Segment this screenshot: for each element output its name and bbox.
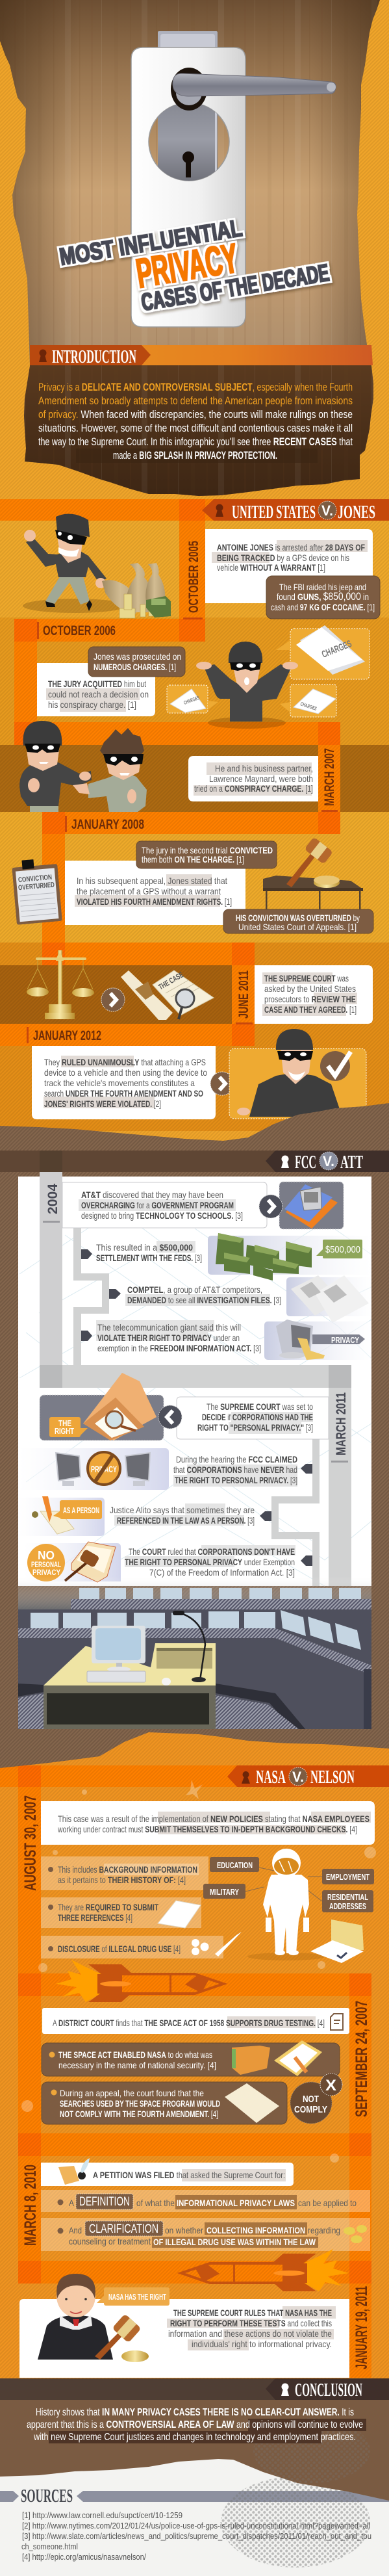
text block: AT&T overcharging: designed to bring TECHNOLOGY TO SCHOOLS. [3] (81, 1210, 243, 1221)
callout: new policies (41, 1801, 375, 1845)
icons: charges documents: CHARGES (183, 695, 201, 706)
date: March 2011 (331, 1392, 349, 1463)
text block: court ruling (125, 1545, 312, 1578)
tag: education: EDUCATION (217, 1860, 253, 1870)
text block: clarification: CLARIFICATION (89, 2222, 158, 2236)
text block: definition: DEFINITION (79, 2195, 130, 2209)
callout: NASA has the right (97, 2287, 169, 2306)
callout: numerous charges: NUMEROUS CHARGES. [1] (94, 662, 176, 672)
heading: FCC v. ATT (0, 1151, 389, 1173)
callout: Antoine Jones arrested: BEING TRACKED by a GPS device on his (217, 553, 349, 563)
badge: not comply (290, 2074, 342, 2124)
callout: appeal: SEARCHES USED BY THE SPACE PROGRAM WOULD (60, 2098, 220, 2109)
text block: sources list: [1] http://www.law.cornell.edu/supct/cert/10-1259 (22, 2510, 182, 2520)
tag: residential addresses (322, 1890, 373, 1912)
heading: introduction: INTRODUCTION (52, 347, 136, 367)
callout: Supreme Court rules: RIGHT TO PERFORM THESE TESTS and collect this (170, 2318, 332, 2328)
intro text background (24, 365, 373, 496)
icon: keyhole (281, 1156, 289, 1168)
callout: unanimous ruling: They RULED UNANIMOUSLY that attaching a GPS (44, 1057, 206, 1067)
callout: Supreme Court rules (19, 2299, 349, 2378)
callout: numerous charges: THE JURY ACQUITTED him but (48, 679, 146, 689)
callout: Supreme Court review: CASE AND THEY AGREED. [1] (264, 1004, 357, 1015)
icon: no personal privacy badge and gavel on book: NO (38, 1549, 55, 1562)
icon: folder with checklist (310, 1919, 364, 1963)
text block: introduction: the way to the Supreme Court. In this infographic you'll see three RECENT CASES that (38, 436, 353, 448)
text block: AT&T overcharging (62, 1182, 267, 1228)
date: 2004: 2004 (45, 1184, 60, 1214)
date: January 2008 (65, 816, 144, 832)
text block: settlement: This resulted in a $500,000 (96, 1242, 193, 1253)
callout: unanimous ruling: device to a vehicle and then using the device to (44, 1067, 207, 1078)
illustration: rocket reversed (181, 2249, 349, 2291)
date: October 2005 (183, 541, 203, 619)
callout: unanimous ruling: track the vehicle's movements constitutes a (44, 1078, 195, 1088)
date: October 2005: OCTOBER 2005 (186, 541, 201, 613)
heading: United States v. Jones: V. (321, 502, 333, 519)
callout: Supreme Court rules: individuals' right to informational privacy. (192, 2339, 332, 2349)
heading: United States v. Jones: UNITED STATES (232, 502, 316, 523)
callout: conviction overturned (223, 909, 373, 933)
decorative sparkles (21, 1780, 376, 2163)
illustration: happy thief with check mark (229, 1029, 366, 1119)
arrow: to the case (101, 988, 125, 1011)
text block: right to privacy (81, 1320, 261, 1353)
icons: charges documents (167, 625, 370, 717)
callout: FBI raid (266, 576, 380, 619)
text block: right to privacy: The telecommunication giant said this will (97, 1322, 241, 1333)
arrow: AT&T circle (259, 1195, 282, 1218)
date: August 30, 2007: AUGUST 30, 2007 (21, 1795, 40, 1891)
icon: gavel and table (263, 837, 363, 910)
panel: brown FCC section background (0, 1103, 389, 1768)
title: PRIVACY (133, 235, 241, 297)
callout: petition (41, 2158, 294, 2186)
text block: clarification: on whether (165, 2225, 203, 2235)
text block: settlement (81, 1241, 202, 1263)
callout: unanimous ruling: search UNDER THE FOURTH AMENDMENT AND SO (44, 1088, 203, 1099)
icon: keyhole (242, 1771, 250, 1784)
panel: conclusion background and sources paper (0, 2378, 389, 2576)
callout: Supreme Court review: THE SUPREME COURT was (264, 973, 349, 983)
icon: stacks of cash (208, 1233, 371, 1281)
illustration: rocket (56, 1960, 223, 2002)
badge: not comply: NOT (303, 2094, 319, 2105)
icon: as a person document (18, 1496, 105, 1536)
date: January 19, 2011: JANUARY 19, 2011 (353, 2286, 371, 2369)
illustration: running thief with money bags (23, 514, 171, 618)
text block: background information: as it pertains to THEIR HISTORY OF: [4] (58, 1875, 186, 1885)
callout: NASA has the right: NASA HAS THE RIGHT (108, 2292, 166, 2302)
text block: clarification: OF ILLEGAL DRUG USE WAS WITHIN THE LAW (153, 2237, 316, 2247)
badge: not comply: X (325, 2077, 336, 2094)
text block: conclusion: apparent that this is a CONTROVERSIAL AREA OF LAW and opinions will continue to evolve (27, 2419, 363, 2430)
text block: right to privacy: VIOLATE THEIR RIGHT TO PRIVACY under an (97, 1333, 240, 1343)
callout: numerous charges: could not reach a decision on (48, 689, 149, 699)
date: March 2007: MARCH 2007 (322, 748, 337, 806)
text block: COMPTEL (109, 1284, 281, 1306)
text block: definition: can be applied to (298, 2198, 357, 2208)
text block: sources list: ch_someone.html (21, 2542, 78, 2551)
callout: new policies: This case was a result of the implementation of NEW POLICIES stating that NASA EMPLOYEES (58, 1814, 370, 1824)
icon: the case file with magnifier: THE CASE (157, 970, 185, 992)
text block: introduction: made a BIG SPLASH IN PRIVACY PROTECTION. (113, 450, 277, 462)
text block: court ruling: THE RIGHT TO PERSONAL PRIVACY under Exemption (125, 1557, 295, 1567)
callout: conviction overturned: United States Court of Appeals. [1] (238, 922, 357, 932)
illustration: judge with gavel (38, 2274, 149, 2362)
callout: appeal: During an appeal, the court found that the (60, 2088, 204, 2098)
tag: military: MILITARY (210, 1887, 239, 1897)
tag: employment: EMPLOYMENT (326, 1872, 370, 1882)
text block: clarification: COLLECTING INFORMATION (207, 2225, 305, 2235)
callout: Antoine Jones arrested: vehicle WITHOUT A WARRANT [1] (217, 562, 325, 573)
text block: clarification: And (69, 2225, 82, 2235)
callout: FBI raid: cash and 97 KG OF COCAINE. [1] (271, 602, 375, 612)
text block: FCC claimed (173, 1454, 312, 1487)
text block: references (41, 1897, 201, 1928)
text block: Supreme Court to decide (177, 1397, 329, 1439)
text block: introduction (38, 382, 353, 463)
date: January 2012: JANUARY 2012 (33, 1028, 101, 1043)
heading: introduction (30, 345, 373, 367)
text block: Justice Alito (110, 1503, 271, 1526)
text block: FCC claimed: During the hearing the FCC CLAIMED (176, 1454, 297, 1464)
text block: background information: This includes BACKGROUND INFORMATION (58, 1864, 197, 1875)
text block: COMPTEL: DEMANDED to see all INVESTIGATION FILES. [3] (127, 1295, 281, 1305)
illustration: shrugging thief (196, 642, 298, 729)
icon: keyhole (39, 350, 47, 362)
date: October 2006 (37, 622, 116, 639)
callout: Space Act enabled NASA: necessary in the name of national security. [4] (58, 2060, 216, 2070)
date: January 2012 (27, 1027, 101, 1043)
callout: district court (42, 2008, 349, 2034)
panel: wood door header (0, 0, 389, 501)
callout: FBI raid: The FBI raided his jeep and (279, 582, 366, 592)
callout: Supreme Court review (255, 965, 373, 1024)
text block: Justice Alito: REFERENCED IN THE LAW AS A PERSON. [3] (117, 1515, 255, 1526)
heading: United States v. Jones (202, 499, 389, 523)
text block: Supreme Court to decide: RIGHT TO "PERSONAL PRIVACY." [3] (197, 1422, 313, 1433)
text block: Supreme Court to decide: DECIDE if CORPORATIONS HAD THE (202, 1412, 313, 1422)
text block: conclusion (27, 2407, 366, 2443)
illustration: astronaut with tags (203, 1849, 374, 1960)
date: January 2008: JANUARY 2008 (71, 817, 144, 832)
badge: not comply: COMPLY (294, 2104, 327, 2115)
callout: subsequent appeal: The jury in the second trial CONVICTED (142, 845, 273, 855)
icon: scales of justice (27, 950, 94, 1019)
heading: FCC v. ATT: ATT (340, 1152, 363, 1173)
date: September 24, 2007: SEPTEMBER 24, 2007 (353, 2001, 371, 2117)
illustration: Jones and Maynard (19, 721, 147, 812)
heading: NASA v. Nelson: NASA (256, 1767, 286, 1788)
callout: Space Act enabled NASA (42, 2040, 340, 2076)
callout: petition: A PETITION WAS FILED that asked the Supreme Court for: (93, 2170, 285, 2180)
text block: clarification (41, 2218, 370, 2251)
icons: charges documents: CHARGES (320, 638, 353, 660)
panel: white FCC timeline (18, 1151, 371, 1586)
text block: AT&T overcharging: OVERCHARGING for a GOVERNMENT PROGRAM (81, 1200, 234, 1210)
callout: subsequent appeal: VIOLATED HIS FOURTH AMENDMENT RIGHTS. [1] (77, 896, 232, 907)
text block: definition: INFORMATIONAL PRIVACY LAWS (177, 2198, 295, 2208)
icon: monitor leaking privacy: PRIVACY (331, 1335, 359, 1345)
callout: subsequent appeal: them both ON THE CHARGE. [1] (142, 854, 244, 865)
callout: subsequent appeal: In his subsequent appeal, Jones stated that (77, 876, 227, 886)
callout: Space Act enabled NASA: THE SPACE ACT ENABLED NASA to do what was (58, 2049, 212, 2060)
text block: AT&T overcharging: AT&T discovered that they may have been (81, 1190, 223, 1200)
tag: education (210, 1857, 259, 1872)
callout: numerous charges: his conspiracy charge. [1] (48, 699, 136, 710)
tag: residential addresses: ADDRESSES (329, 1901, 366, 1911)
callout: subsequent appeal (65, 841, 277, 925)
icon: door handle plate (131, 31, 336, 327)
icon: conviction overturned clipboard: OVERTURNED (18, 881, 55, 892)
text block: court ruling: 7(C) of the Freedom of Information Act. [3] (149, 1567, 295, 1578)
icon: folder with magnifier: THE (58, 1418, 71, 1428)
icon: folder with magnifier: RIGHT (55, 1426, 74, 1436)
monitor and keyboard (87, 1626, 171, 1685)
callout: numerous charges (37, 647, 185, 716)
callout: appeal: NOT COMPLY WITH THE FOURTH AMENDMENT. [4] (60, 2109, 218, 2119)
text block: settlement: SETTLEMENT WITH THE FEDS. [3] (96, 1253, 202, 1263)
icon: monitor leaking privacy (264, 1320, 371, 1360)
text block: right to privacy: exemption in the FREEDOM INFORMATION ACT. [3] (97, 1343, 261, 1353)
icon: no personal privacy badge and gavel on book (23, 1542, 121, 1582)
heading: NASA v. Nelson: NELSON (310, 1767, 355, 1788)
heading: FCC v. ATT: FCC (295, 1152, 316, 1173)
icon: monitors with no privacy sign (18, 1448, 169, 1490)
callout: Supreme Court rules: information and these actions do not violate the (168, 2328, 332, 2339)
date: June 2011 (236, 970, 253, 1024)
icon: keyhole (281, 2383, 289, 2396)
callout: FBI raid: found GUNS, $850,000 in (277, 590, 369, 603)
text block: illegal drug use (41, 1932, 242, 1958)
text block: sources list (21, 2510, 371, 2562)
icon: folder with magnifier (40, 1373, 164, 1440)
text block: Supreme Court to decide: The SUPREME COURT was set to (207, 1401, 313, 1412)
text block: definition: of what the (136, 2198, 175, 2208)
date: October 2006: OCTOBER 2006 (43, 623, 116, 638)
callout: conspiracy charge: He and his business partner, (215, 763, 313, 774)
icon: stacks of cash: $500,000 (325, 1244, 360, 1255)
text block: court ruling: The COURT ruled that CORPORATIONS DON'T HAVE (129, 1546, 295, 1557)
icon: conviction overturned clipboard: CONVICTION (18, 874, 52, 884)
text block: references: They are REQUIRED TO SUBMIT (58, 1902, 158, 1912)
title (58, 215, 331, 316)
icon: no personal privacy badge and gavel on book: PERSONAL (31, 1560, 61, 1569)
text block: definition (41, 2190, 370, 2212)
callout: conspiracy charge (188, 756, 318, 801)
text block: clarification: counseling or treatment (69, 2236, 151, 2246)
icon: conviction overturned clipboard (12, 857, 62, 925)
callout: Supreme Court review: asked by the United States (264, 983, 356, 994)
date: March 8, 2010: MARCH 8, 2010 (21, 2165, 40, 2246)
tag: employment (322, 1869, 374, 1884)
text block: FCC claimed: that CORPORATIONS have NEVER had (173, 1464, 297, 1475)
text block: background information (41, 1856, 208, 1890)
callout: subsequent appeal: the placement of a GPS without a warrant (77, 886, 221, 896)
text block: illegal drug use: DISCLOSURE of ILLEGAL DRUG USE [4] (58, 1944, 181, 1954)
arrow: to happy thief (210, 1072, 234, 1095)
callout: Antoine Jones arrested: ANTOINE JONES is arrested after 28 DAYS OF (217, 542, 365, 553)
callout: appeal (42, 2082, 287, 2124)
title: MOST INFLUENTIAL (58, 215, 244, 270)
text block: FCC claimed: THE RIGHT TO PERSONAL PRIVACY. [3] (175, 1475, 297, 1485)
icon: no personal privacy badge and gavel on book: PRIVACY (32, 1568, 60, 1577)
heading: sources: SOURCES (21, 2486, 73, 2506)
date: 2004 (43, 1184, 60, 1223)
heading: NASA v. Nelson: V. (292, 1769, 304, 1785)
text block: sources list: [4] http://epic.org/amicus/nasavnelson/ (22, 2552, 146, 2562)
date: March 2007 (321, 748, 338, 812)
heading: conclusion (266, 2378, 389, 2400)
text block: references: THREE REFERENCES [4] (58, 1912, 132, 1923)
date: March 2011: MARCH 2011 (334, 1392, 349, 1455)
text block: definition: A (69, 2198, 75, 2208)
text block: introduction: Privacy is a DELICATE AND CONTROVERSIAL SUBJECT, especially when the Fourth (38, 382, 353, 393)
icons: charges documents: CHARGES (299, 701, 318, 712)
callout: numerous charges: Jones was prosecuted on (94, 651, 181, 662)
microphone (173, 1611, 206, 1682)
callout: conspiracy charge: tried on a CONSPIRACY CHARGE. [1] (194, 783, 313, 794)
illustration: courtroom (18, 1576, 371, 1729)
icon: the case file with magnifier (121, 970, 214, 1020)
icon: as a person document: AS A PERSON (63, 1505, 99, 1515)
tag: residential addresses: RESIDENTIAL (327, 1892, 368, 1902)
text block: clarification: regarding (308, 2225, 340, 2235)
text block: COMPTEL: COMPTEL, a group of AT&T competitors, (127, 1284, 262, 1295)
tag: military (203, 1884, 245, 1899)
date: June 2011: JUNE 2011 (236, 970, 251, 1019)
callout: district court: A DISTRICT COURT finds that THE SPACE ACT OF 1958 SUPPORTS DRUG TESTING. [4] (53, 2018, 325, 2028)
icon: keyhole (216, 504, 223, 517)
callout: conspiracy charge: Lawrence Maynard, were both (209, 774, 313, 784)
icon: investigation files (286, 1275, 371, 1323)
icon: books and tablet (279, 1182, 344, 1229)
heading: NASA v. Nelson (227, 1765, 389, 1788)
callout: Supreme Court review: prosecutors to REVIEW THE (264, 994, 356, 1004)
heading: FCC v. ATT: V. (323, 1153, 334, 1169)
desk (44, 1643, 216, 1729)
callout: unanimous ruling (32, 1046, 216, 1119)
text block: Justice Alito: Justice Alito says that sometimes they are (110, 1505, 255, 1515)
icon: monitors with no privacy sign: PRIVACY (91, 1464, 117, 1474)
callout: unanimous ruling: JONES' RIGHTS WERE VIOLATED. [2] (44, 1099, 161, 1109)
arrow: back to folder (158, 1405, 182, 1429)
callout: Antoine Jones arrested (205, 529, 373, 603)
